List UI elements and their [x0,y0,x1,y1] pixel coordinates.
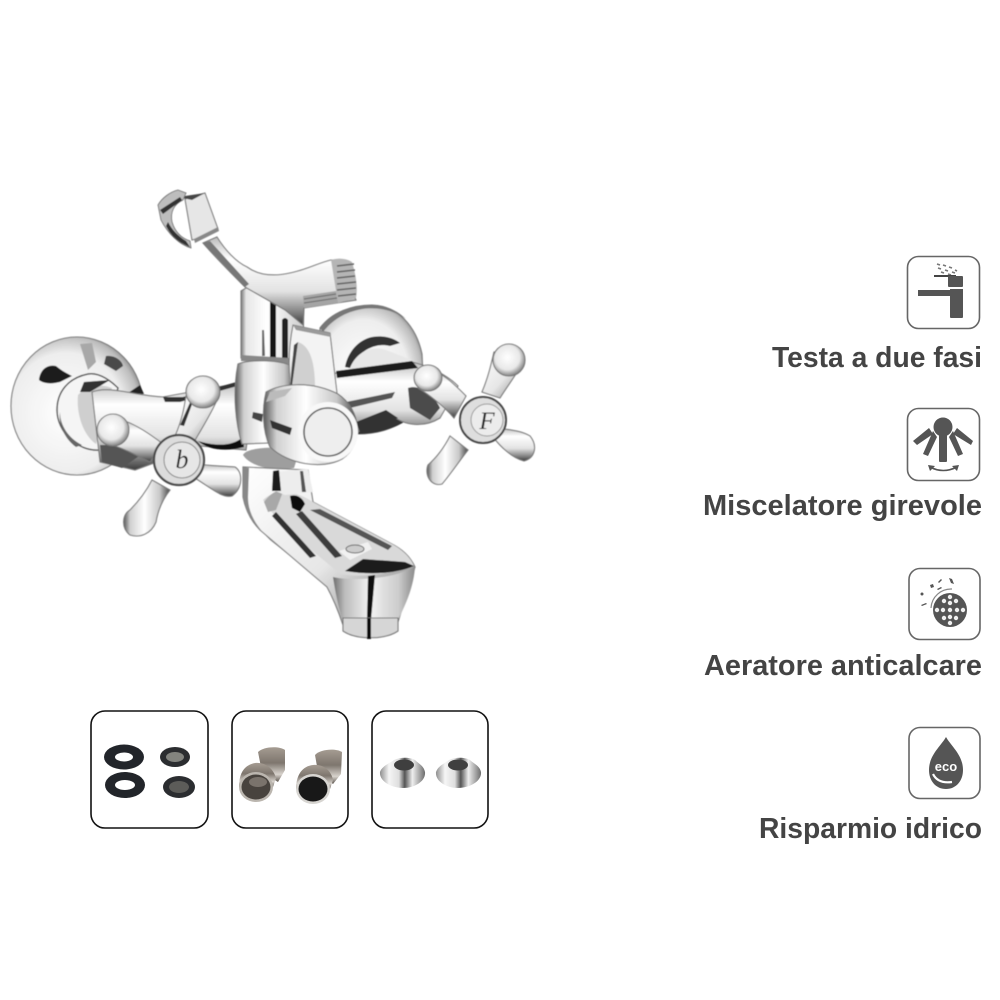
left horizontal arm [92,381,252,470]
feature: two-stage head [772,256,982,374]
label: Miscelatore girevole [703,490,982,522]
label: Aeratore anticalcare [704,650,982,682]
faucet product image [11,190,535,639]
icon: aerator [909,568,980,640]
accessory box: chrome escutcheons [372,711,488,828]
centre column [235,278,304,469]
icon: faucet with spray [908,256,980,328]
handle letter: b [176,445,188,474]
rubber washers [104,744,195,798]
right cross handle [414,344,535,485]
left cross handle [97,376,241,536]
icon: eco water drop [909,728,980,798]
escutcheon left [380,758,425,788]
left wall plate [11,337,144,475]
spout [243,467,415,639]
icon: swivel spout [908,408,980,480]
feature: anti-limescale aerator [704,568,982,682]
connector right [296,750,342,804]
accessory box: eccentric connectors [232,711,348,828]
feature: swivel mixer [703,408,982,522]
escutcheon right [436,758,481,788]
right horizontal arm [322,361,458,440]
right wall plate [320,305,424,434]
label: Testa a due fasi [772,342,982,374]
icon: eco water drop: eco [935,759,957,774]
connector left [239,747,285,802]
accessory box: washers [91,711,208,828]
shower holder and outlet [158,190,357,325]
label: Risparmio idrico [759,813,982,845]
handle letter: F [478,408,495,435]
centre lever [263,325,358,465]
feature: water saving [759,728,982,845]
